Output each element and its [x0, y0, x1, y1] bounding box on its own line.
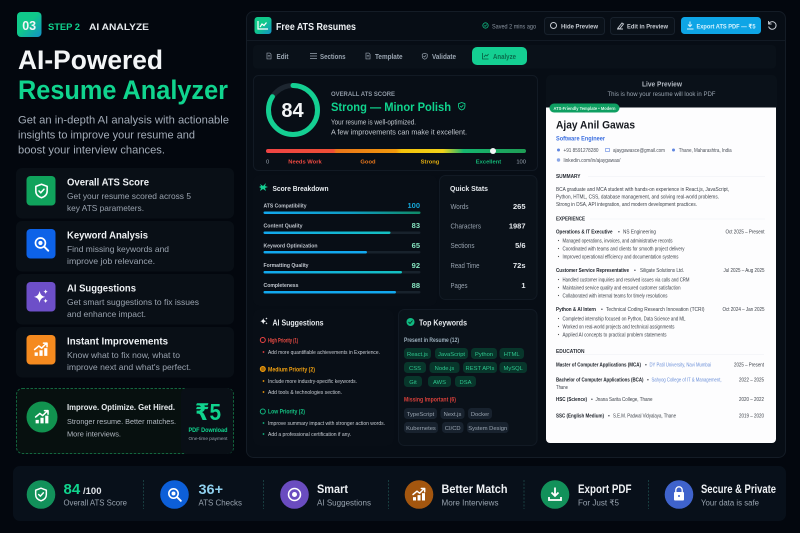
- panel: quick stats: [440, 176, 537, 300]
- feature text: improve next and what's perfect.: [67, 362, 191, 372]
- price box: One-time payment: [188, 436, 228, 442]
- resume experience: [556, 216, 765, 338]
- button: edit in preview: [610, 18, 674, 34]
- preview heading: This is how your resume will look in PDF: [608, 91, 716, 98]
- row: keyword optimization: [264, 241, 420, 254]
- resume education: 2022 – 2025: [739, 378, 764, 384]
- job 2: Siligate Solutions Ltd.: [640, 268, 684, 274]
- resume contact: linkedin.com/in/ajaygawas/: [564, 158, 621, 164]
- resume education: 2019 – 2020: [739, 414, 764, 420]
- tab: template: [366, 53, 403, 61]
- promo text: [67, 403, 176, 438]
- resume contact: [557, 148, 732, 164]
- resume education: •: [608, 414, 610, 420]
- resume education: •: [647, 378, 649, 384]
- feature text: [67, 178, 191, 213]
- resume education: Jnana Sarita College, Thane: [596, 397, 653, 403]
- resume education: •: [645, 362, 647, 368]
- feature text: improve job relevance.: [67, 256, 155, 266]
- app logo: [254, 17, 272, 34]
- present keyword chips: [404, 348, 527, 387]
- preview heading: Live Preview: [642, 82, 683, 88]
- score text: [331, 91, 467, 136]
- button: hide preview: Hide Preview: [561, 23, 598, 30]
- job 1: Improved operational efficiency and documentation systems: [562, 254, 679, 260]
- title: [18, 45, 228, 105]
- score scale bar: [266, 148, 526, 166]
- present keyword chips: MySQL: [504, 366, 524, 372]
- present keyword chips: CSS: [409, 366, 421, 372]
- resume name and title: Ajay Anil Gawas: [556, 120, 635, 132]
- stat: better match: More Interviews: [442, 498, 498, 508]
- high priority group: Add more quantifiable achievements in Experience.: [268, 350, 380, 356]
- row: content quality: 83: [412, 221, 420, 230]
- stat rows: Characters: [450, 221, 481, 230]
- suggestions heading: AI Suggestions: [272, 318, 324, 327]
- job 2: Handled customer inquiries and resolved issues via calls and CRM: [562, 277, 690, 283]
- feature text: [67, 230, 169, 266]
- missing keyword chips: Kubernetes: [406, 426, 436, 432]
- icon: shield: [26, 176, 56, 206]
- stat rows: Words: [450, 202, 469, 211]
- job 2: Customer Service Representative: [556, 268, 629, 274]
- resume contact: Thane, Maharashtra, India: [679, 148, 732, 154]
- row: ATS compatibility: [264, 201, 420, 214]
- missing keyword chips: Docker: [471, 412, 489, 418]
- feature text: and enhance impact.: [67, 309, 146, 319]
- present keyword chips: REST APIs: [466, 366, 495, 372]
- price box: [181, 388, 233, 454]
- job 2: Maintained service quality and ensured customer satisfaction: [562, 285, 681, 291]
- stat rows: 5/6: [515, 241, 526, 250]
- stat: secure and private: Your data is safe: [701, 498, 760, 508]
- job 1: Oct 2025 – Present: [726, 229, 765, 235]
- row: completeness: [264, 281, 420, 294]
- resume contact: ajaygawasce@gmail.com: [613, 148, 665, 154]
- row: content quality: Content Quality: [264, 224, 303, 230]
- stat: ATS checks: ATS Checks: [198, 498, 242, 508]
- medium priority group: Add tools & technologies section.: [268, 390, 342, 396]
- promo text: More interviews.: [67, 430, 121, 438]
- resume education: [556, 349, 764, 420]
- intro paragraph: boost your interview chances.: [18, 144, 165, 156]
- app window panel: [246, 12, 786, 458]
- feature text: Know what to fix now, what to: [67, 350, 180, 360]
- job 1: [556, 229, 765, 260]
- job 2: •: [634, 268, 636, 274]
- breakdown heading: [259, 183, 328, 193]
- resume education: S.E.M. Padwal Vidyalaya, Thane: [613, 414, 676, 420]
- tab: sections: Sections: [320, 54, 346, 61]
- stat: smart suggestions: [280, 480, 371, 509]
- score gauge: 84: [281, 100, 304, 122]
- stat: ATS checks: 36+: [198, 481, 223, 497]
- saved status: [483, 23, 537, 30]
- panel: AI suggestions: [254, 310, 394, 446]
- resume contact: +91 8591278280: [564, 148, 599, 154]
- stat: smart suggestions: AI Suggestions: [317, 498, 371, 508]
- stat rows: Read Time: [450, 261, 480, 270]
- feature text: Instant Improvements: [67, 336, 168, 348]
- promo text: Stronger resume. Better matches.: [67, 417, 176, 426]
- job 3: Technical Coding Research Innovation (TCRI): [606, 307, 705, 313]
- low priority group: [260, 408, 385, 438]
- job 1: Operations & IT Executive: [556, 229, 613, 235]
- job 3: Python & AI Intern: [556, 307, 596, 313]
- row: content quality: [264, 221, 420, 234]
- high priority group: High Priority (1): [268, 337, 298, 344]
- bottom stats bar: [13, 466, 786, 521]
- resume name and title: Software Engineer: [556, 136, 605, 142]
- step name: AI ANALYZE: [89, 22, 149, 33]
- feature text: Get your resume scored across 5: [67, 191, 191, 201]
- present keywords label: Present in Resume (12): [404, 338, 459, 344]
- step header: [17, 12, 149, 37]
- row: formatting quality: Formatting Quality: [264, 263, 309, 269]
- button: hide preview: [544, 18, 604, 34]
- job 3: •: [601, 307, 603, 313]
- stat: smart suggestions: Smart: [317, 482, 348, 496]
- resume education: 2020 – 2022: [739, 397, 764, 403]
- job 1: NS Engineering: [623, 229, 656, 235]
- row: keyword optimization: Keyword Optimization: [264, 243, 318, 249]
- missing keyword chips: [404, 408, 508, 433]
- panel: score breakdown: [254, 176, 436, 306]
- stat: ATS score: 84: [64, 481, 81, 498]
- stat: ATS score: [27, 480, 128, 509]
- job 2: Collaborated with internal teams for timely resolutions: [562, 293, 668, 299]
- feature text: Find missing keywords and: [67, 244, 169, 254]
- stat rows: 1987: [509, 221, 526, 230]
- stat rows: [450, 202, 526, 290]
- job 2: Jul 2025 – Aug 2025: [724, 268, 765, 274]
- job 3: Oct 2024 – Jan 2025: [722, 307, 765, 313]
- feature text: key ATS parameters.: [67, 203, 144, 213]
- resume page: [546, 104, 776, 443]
- title: AI-Powered: [18, 45, 163, 75]
- job 3: Completed internship focused on Python, Data Science and ML: [562, 316, 686, 322]
- missing keyword chips: TypeScript: [407, 412, 435, 418]
- medium priority group: Include more industry-specific keywords.: [268, 379, 357, 385]
- app name: Free ATS Resumes: [276, 22, 356, 33]
- feature text: AI Suggestions: [67, 284, 136, 294]
- stat rows: Sections: [450, 241, 475, 250]
- price box: PDF Download: [188, 428, 228, 434]
- template badge: ATS-Friendly Template • Modern: [554, 106, 616, 111]
- icon: magnifier: [26, 229, 56, 258]
- row: keyword optimization: 65: [412, 241, 420, 250]
- score gauge: [268, 86, 318, 134]
- preview heading: [608, 82, 716, 98]
- feature text: [67, 336, 191, 372]
- resume education: HSC (Science): [556, 397, 587, 403]
- medium priority group: Medium Priority (2): [268, 366, 315, 373]
- tab: sections: [310, 54, 346, 61]
- tab: validate: [422, 53, 456, 61]
- present keyword chips: Python: [475, 352, 493, 358]
- feature text: [67, 284, 199, 319]
- button: edit in preview: Edit in Preview: [627, 23, 668, 30]
- resume education: EDUCATION: [556, 349, 585, 355]
- stat rows: 265: [513, 202, 526, 211]
- stat: export PDF: [541, 480, 632, 509]
- row: completeness: Completeness: [264, 283, 298, 289]
- present keyword chips: AWS: [433, 380, 446, 386]
- stat: secure and private: [665, 480, 776, 509]
- job 3: Worked on real-world projects and technical assignments: [562, 324, 675, 330]
- stat: export PDF: For Just ₹5: [578, 498, 620, 508]
- panel: top keywords: [398, 310, 537, 446]
- icon: growth circle: [26, 402, 58, 432]
- tab: edit: Edit: [276, 54, 289, 61]
- score text: OVERALL ATS SCORE: [331, 91, 395, 98]
- missing keywords label: Missing Important (6): [404, 398, 456, 404]
- low priority group: Low Priority (2): [268, 408, 305, 416]
- stat: better match: Better Match: [442, 482, 508, 496]
- resume education: 2025 – Present: [734, 362, 764, 368]
- resume summary: SUMMARY: [556, 174, 581, 180]
- tab: template: Template: [375, 54, 403, 61]
- score scale bar: Needs Work: [288, 160, 322, 166]
- icon: growth chart: [26, 335, 56, 364]
- score scale bar: Good: [360, 160, 376, 166]
- tab: validate: Validate: [432, 54, 456, 61]
- resume summary: Python, HTML, CSS, database management, and solving real-world problems.: [556, 194, 719, 200]
- present keyword chips: DSA: [460, 380, 472, 386]
- button: export PDF: [681, 17, 761, 34]
- present keyword chips: Node.js: [435, 366, 454, 372]
- template badge: [550, 104, 620, 112]
- row: completeness: 88: [412, 281, 420, 290]
- missing keyword chips: Next.js: [444, 412, 461, 418]
- job 3: [556, 307, 765, 338]
- panel: live preview: [546, 75, 777, 443]
- row: ATS compatibility: 100: [407, 201, 420, 210]
- score text: Strong — Minor Polish: [331, 100, 451, 114]
- job 1: •: [618, 229, 620, 235]
- resume education: Sahyog College of IT & Management,: [652, 378, 722, 384]
- intro paragraph: Get an in-depth AI analysis with actionable: [18, 114, 229, 126]
- stat rows: 72s: [513, 261, 526, 270]
- low priority group: Improve summary impact with stronger action words.: [268, 421, 385, 427]
- row: formatting quality: [264, 261, 420, 274]
- quick stats heading: Quick Stats: [450, 184, 488, 193]
- missing keyword chips: CI/CD: [445, 426, 461, 432]
- resume education: •: [591, 397, 593, 403]
- panel: overall score: [254, 76, 538, 170]
- promo card: [16, 388, 234, 454]
- low priority group: Add a professional certification if any.: [268, 432, 351, 438]
- resume education: DY Patil University, Navi Mumbai: [650, 362, 711, 368]
- resume education: Master of Computer Applications (MCA): [556, 362, 641, 368]
- tab bar: [253, 45, 776, 68]
- button: export PDF: Export ATS PDF — ₹5: [696, 23, 756, 30]
- feature: instant improvements: [16, 327, 234, 378]
- job 3: Applied AI concepts to practical problem statements: [562, 332, 667, 338]
- missing keyword chips: System Design: [468, 426, 507, 432]
- score scale bar: Excellent: [476, 160, 501, 166]
- price box: ₹5: [195, 399, 221, 425]
- promo text: Improve. Optimize. Get Hired.: [67, 403, 175, 412]
- app header: [247, 17, 785, 40]
- resume education: SSC (English Medium): [556, 414, 604, 420]
- stat: ATS score: Overall ATS Score: [64, 498, 128, 508]
- step label: STEP 2: [48, 22, 80, 33]
- tab: analyze active: [472, 47, 527, 65]
- present keyword chips: JavaScript: [438, 352, 465, 358]
- row: formatting quality: 92: [412, 261, 420, 270]
- resume name and title: [556, 120, 635, 142]
- present keyword chips: HTML: [504, 352, 520, 358]
- tab: edit: [267, 53, 289, 61]
- score text: Your resume is well-optimized.: [331, 120, 416, 126]
- job 2: [556, 268, 765, 299]
- resume summary: BCA graduate and MCA student with hands-on experience in React.js, JavaScript,: [556, 187, 729, 193]
- step number badge: 03: [22, 19, 36, 33]
- stat: ATS score: /100: [83, 486, 102, 497]
- present keyword chips: Git: [409, 380, 417, 386]
- icon: sparkles: [26, 282, 56, 312]
- title: Resume Analyzer: [18, 75, 228, 105]
- resume education: Bachelor of Computer Applications (BCA): [556, 378, 644, 384]
- intro paragraph: [18, 114, 229, 156]
- stat: better match: [405, 480, 508, 509]
- row: ATS compatibility: ATS Compatibility: [264, 204, 307, 210]
- score scale bar: 0: [266, 160, 269, 166]
- score scale bar: 100: [516, 160, 526, 166]
- resume experience: EXPERIENCE: [556, 216, 585, 222]
- resume education: Thane: [556, 385, 568, 391]
- medium priority group: [260, 366, 357, 396]
- stat: ATS checks: [160, 480, 242, 509]
- stat: export PDF: Export PDF: [578, 482, 632, 496]
- feature: keyword analysis: [16, 221, 234, 272]
- breakdown heading: Score Breakdown: [272, 184, 328, 193]
- feature: AI suggestions: [16, 274, 234, 324]
- saved status: Saved 2 mins ago: [492, 24, 537, 30]
- feature text: Get smart suggestions to fix issues: [67, 297, 199, 307]
- left column: intro and features: [16, 12, 234, 454]
- feature text: Keyword Analysis: [67, 230, 148, 242]
- resume summary: Strong in DSA, API integration, and modern development practices.: [556, 202, 697, 208]
- intro paragraph: insights to improve your resume and: [18, 130, 195, 142]
- job 1: Coordinated with teams and clients for smooth project delivery: [562, 246, 685, 252]
- tab: analyze active: Analyze: [493, 54, 516, 61]
- resume summary: [556, 174, 765, 208]
- present keyword chips: React.js: [407, 352, 428, 358]
- feature: overall ATS score: [16, 168, 234, 218]
- keywords heading: Top Keywords: [419, 318, 467, 327]
- score text: A few improvements can make it excellent.: [331, 130, 467, 136]
- job 1: Managed operations, invoices, and administrative records: [562, 238, 673, 244]
- score scale bar: Strong: [421, 160, 440, 166]
- icon: reset: [769, 21, 776, 29]
- high priority group: [260, 337, 380, 356]
- feature text: Overall ATS Score: [67, 178, 149, 188]
- stat rows: 1: [521, 281, 526, 290]
- stat: secure and private: Secure & Private: [701, 482, 776, 496]
- stat rows: Pages: [450, 281, 468, 290]
